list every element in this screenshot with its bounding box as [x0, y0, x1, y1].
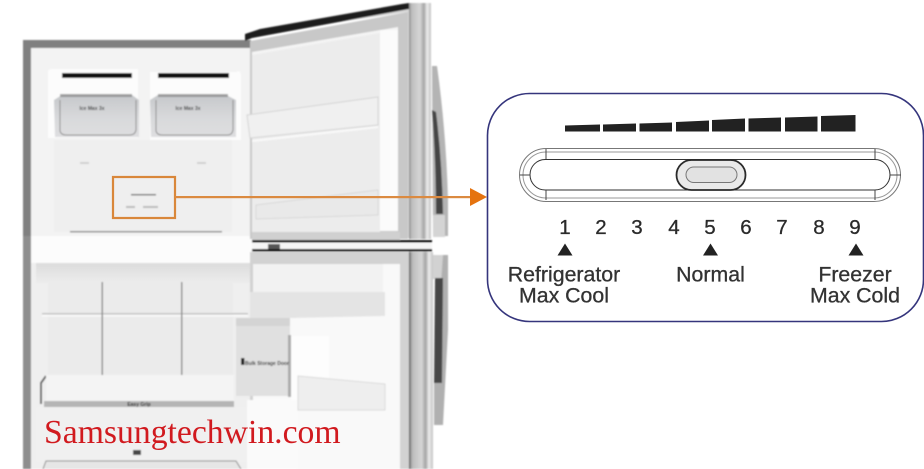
scale numbers	[559, 216, 861, 239]
lower door	[236, 252, 448, 469]
panel: temperature control detail	[488, 94, 924, 322]
ice tray right: Ice Max 3x	[175, 106, 201, 112]
label: freezer max cold: Freezer	[818, 262, 892, 286]
ice tray right	[150, 71, 241, 140]
orange arrow	[175, 188, 487, 206]
ice tray left	[48, 69, 139, 140]
label: freezer max cold: Max Cold	[810, 284, 900, 308]
scale numbers: 3	[631, 216, 643, 239]
scale numbers: 1	[559, 216, 571, 239]
slider knob	[676, 160, 746, 190]
orange highlight box	[113, 177, 175, 218]
pointer triangles	[558, 244, 864, 256]
bulk storage box: Bulk Storage Door	[245, 361, 289, 367]
label: normal: Normal	[676, 262, 745, 286]
refrigerator compartment	[23, 236, 253, 469]
upper door shelf	[247, 97, 378, 138]
lower door shelf	[250, 292, 385, 318]
scale numbers: 6	[740, 216, 752, 239]
scale numbers: 7	[776, 216, 788, 239]
scale numbers: 8	[813, 216, 825, 239]
watermark: Samsungtechwin.com	[44, 414, 341, 451]
label: refrigerator max cool: Max Cool	[519, 284, 609, 308]
crisper drawer: Easy Grip	[127, 402, 151, 408]
scale numbers: 5	[704, 216, 716, 239]
upper door	[245, 3, 448, 240]
door gap lines	[252, 240, 432, 252]
control panel on freezer wall	[80, 162, 206, 208]
refrigerator photo	[23, 3, 448, 469]
scale numbers: 2	[595, 216, 607, 239]
crisper drawer	[44, 375, 234, 408]
label: refrigerator max cool: Refrigerator	[508, 262, 620, 286]
bulk storage box	[236, 318, 329, 406]
door edge	[409, 3, 431, 239]
ice tray left: Ice Max 3x	[79, 106, 105, 112]
lower shelf of upper door	[256, 190, 378, 219]
bottom door shelf	[298, 376, 385, 410]
slider track	[520, 148, 901, 202]
divider between compartments	[31, 236, 253, 263]
scale numbers: 4	[668, 216, 680, 239]
upper door handle	[432, 66, 448, 237]
lower door handle	[433, 255, 448, 425]
level bars	[565, 115, 856, 132]
scale numbers: 9	[849, 216, 861, 239]
freezer compartment	[23, 40, 251, 238]
